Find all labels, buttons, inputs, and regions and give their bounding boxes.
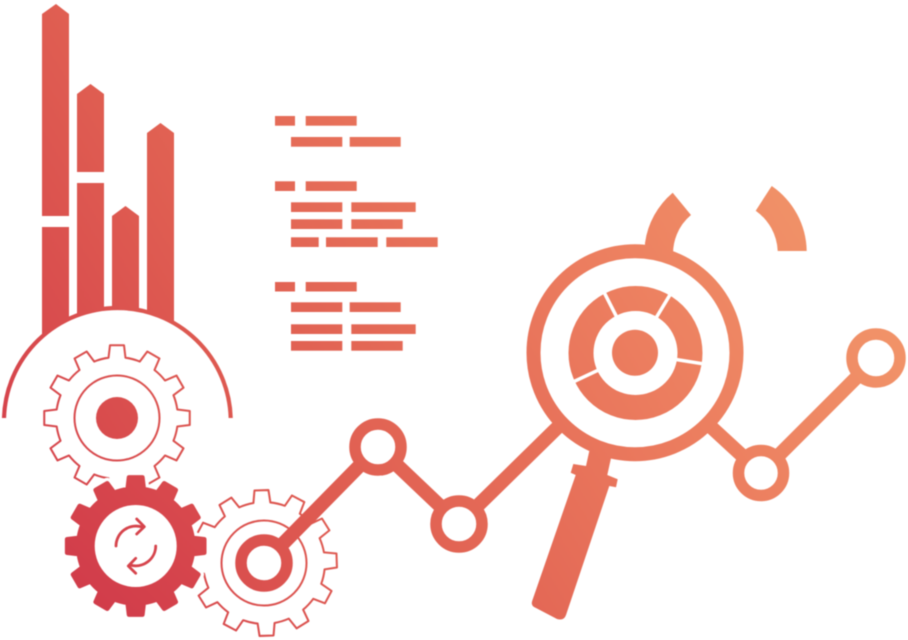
- donut chart in lens: [570, 289, 706, 408]
- node 5: [852, 334, 900, 382]
- column 2 lower: [77, 183, 104, 315]
- dome arc under columns: [4, 308, 231, 418]
- column 2 upper: [77, 84, 104, 172]
- column 3: [112, 206, 139, 310]
- upper right arc segment: [756, 186, 807, 251]
- data point nodes: [241, 334, 900, 586]
- gear: outlined bottom right gear: [189, 488, 339, 638]
- magnifier lens ring: [534, 251, 736, 454]
- text block 2: [275, 181, 438, 247]
- text placeholder lines: [275, 116, 438, 351]
- node 2: [355, 424, 401, 470]
- upper left arc segment: [645, 193, 691, 258]
- node 4: [738, 450, 784, 496]
- column 1 upper: [42, 4, 69, 216]
- node 1 on gear: [241, 540, 287, 586]
- column 1 lower: [42, 227, 69, 336]
- icon: magnifier handle: [532, 451, 618, 620]
- node 3: [436, 501, 482, 547]
- gear: solid gear with refresh icon: [67, 478, 204, 614]
- text block 1: [275, 116, 401, 147]
- column 4: [147, 123, 174, 322]
- icon: refresh arrows: [116, 519, 156, 573]
- text block 3: [275, 282, 416, 351]
- donut centre dot: [612, 330, 658, 376]
- line chart: connecting line: [264, 358, 876, 563]
- bar chart: arrow columns: [42, 4, 174, 336]
- gear: outlined top gear: [44, 345, 190, 491]
